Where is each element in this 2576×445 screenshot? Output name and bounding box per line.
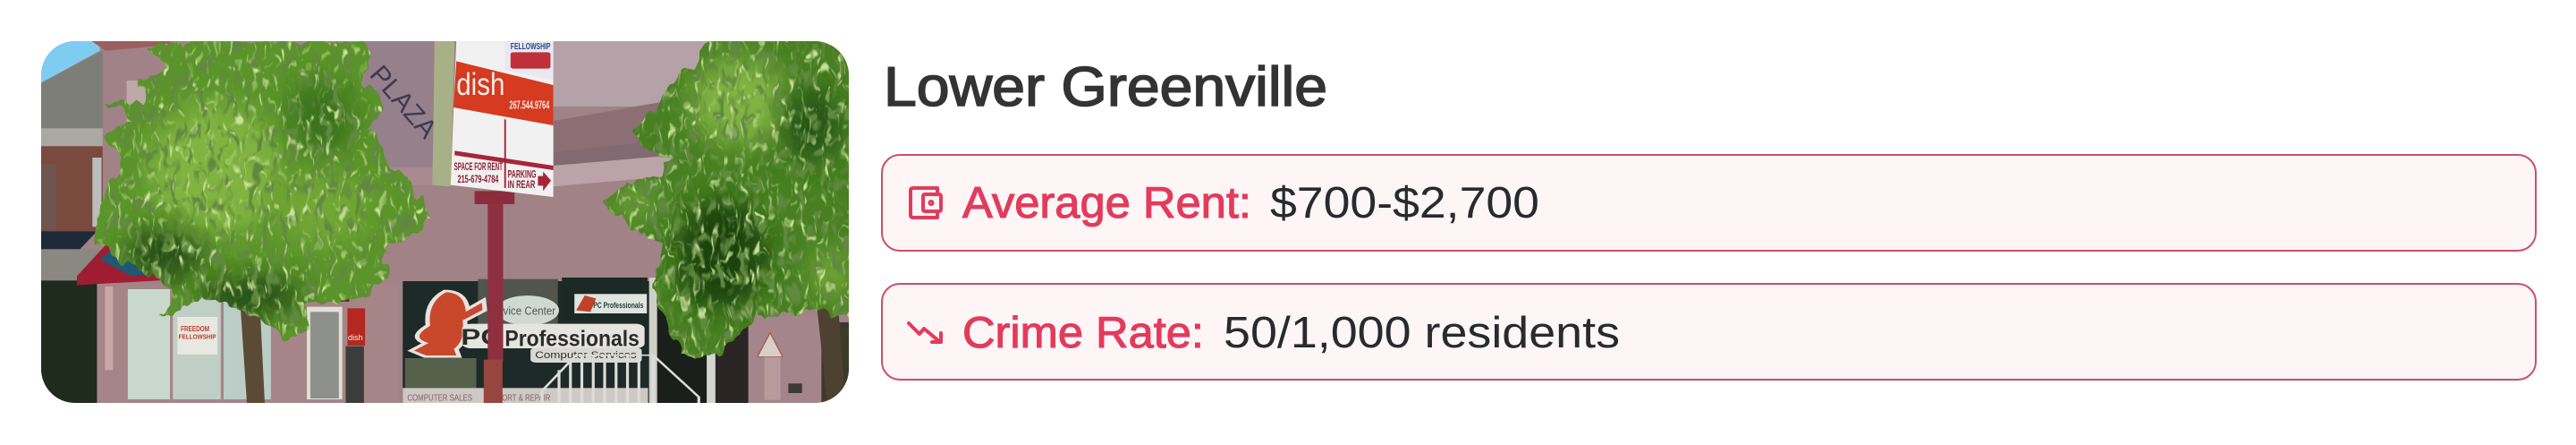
photo: storefront with trees: dish [348, 333, 363, 343]
value: crime rate: 50/1,000 residents [1224, 309, 1620, 357]
right tree [603, 41, 849, 359]
white railing [542, 355, 699, 403]
left tree trunk [241, 310, 265, 403]
photo: storefront with trees: FELLOWSHIP [179, 334, 216, 341]
pylon sign: IN REAR [508, 178, 535, 191]
photo: storefront with trees: FREEDOM [181, 325, 209, 333]
service center oval [503, 295, 559, 324]
pylon sign [432, 41, 554, 197]
photo: storefront with trees: PC Professionals [593, 301, 643, 311]
title: Lower Greenville [884, 56, 1327, 118]
card: average rent [882, 155, 2536, 251]
photo: storefront with trees: 267.544.9764 [510, 99, 549, 112]
pylon sign: 215-679-4784 [457, 173, 499, 185]
right tree trunk [818, 308, 844, 401]
photo: storefront with trees: FELLOWSHIP [511, 41, 550, 52]
pylon sign: dish [456, 67, 504, 102]
value: rent range: $700-$2,700 [1270, 179, 1539, 227]
icon: wallet [911, 188, 941, 218]
pylon sign: SPACE FOR RENT [454, 160, 503, 173]
photo: storefront with trees: PC [461, 325, 502, 349]
photo: storefront with trees: rvice Center [500, 305, 556, 318]
icon: trending down [909, 323, 941, 342]
label: average rent: Average Rent: [962, 179, 1251, 227]
left awning [77, 245, 154, 285]
PC Professionals window lettering [462, 324, 645, 348]
penguin mascot [411, 291, 485, 356]
photo: storefront with trees [34, 31, 863, 406]
photo: storefront with trees: COMPUTER SALES [407, 393, 472, 403]
left tree [80, 36, 447, 349]
photo: storefront with trees: Computer Services [535, 349, 637, 361]
left storefront [97, 284, 100, 403]
right storefront windows [402, 281, 649, 403]
label: crime rate: Crime Rate: [962, 309, 1204, 357]
card: crime rate [882, 284, 2536, 380]
photo: storefront with trees: ORT & REPAIR [502, 393, 550, 403]
PLAZA lettering: PLAZA [364, 60, 443, 144]
pole [487, 203, 503, 361]
right door frame [707, 353, 716, 403]
photo: storefront with trees: Professionals [504, 326, 640, 351]
photo: storefront with trees: PARKING [508, 167, 536, 180]
